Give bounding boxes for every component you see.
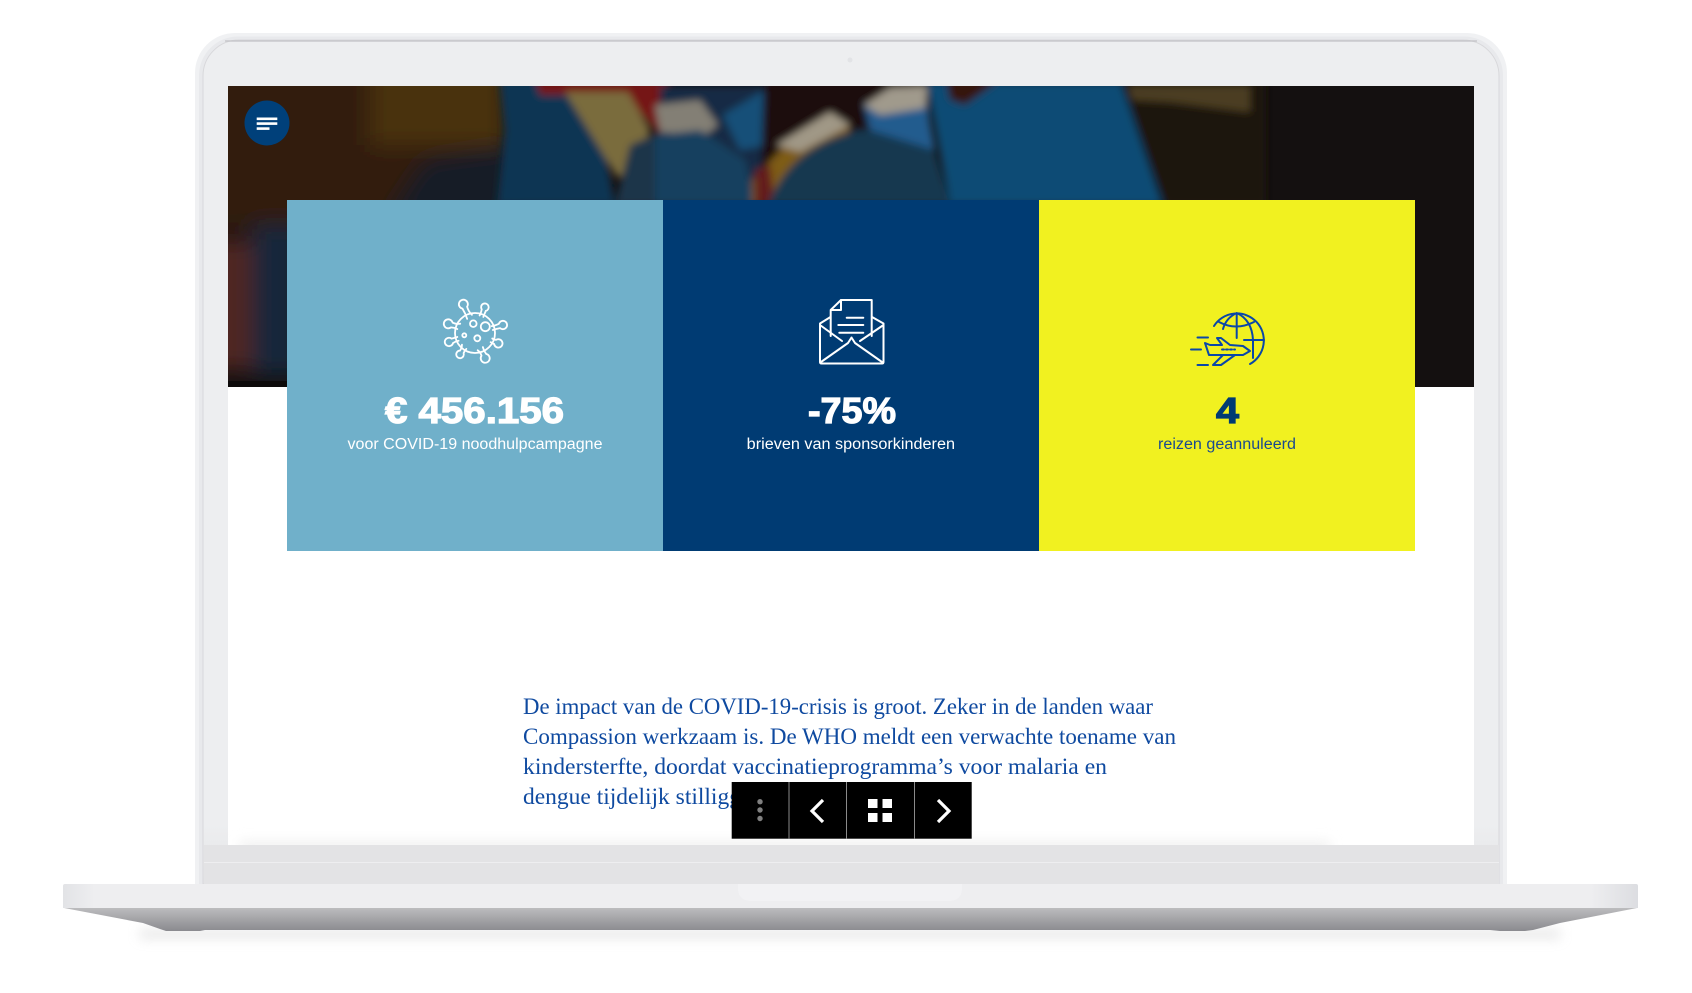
body text <box>523 694 1176 809</box>
screen <box>200 60 1474 852</box>
menu button <box>244 100 290 146</box>
footer shading <box>246 842 1324 845</box>
icon: plane and globe <box>1191 313 1264 365</box>
stat label: brieven van sponsorkinderen <box>747 436 955 453</box>
panel: trips <box>1039 200 1415 551</box>
body text: dengue tijdelijk stilliggen. <box>523 784 769 809</box>
stat value: € 456.156 <box>385 390 564 431</box>
icon: envelope <box>820 300 884 364</box>
icon: virus <box>443 298 508 364</box>
icon: grid <box>868 799 892 822</box>
stat label: reizen geannuleerd <box>1158 436 1296 453</box>
stat value: 4 <box>1216 390 1239 431</box>
body text: kindersterfte, doordat vaccinatieprogramma’s voor malaria en <box>523 754 1108 779</box>
laptop shadow <box>140 930 1560 938</box>
icon: next arrow <box>938 800 949 822</box>
icon: previous arrow <box>812 800 823 822</box>
panel: letters <box>663 200 1039 551</box>
laptop base <box>63 884 1638 931</box>
icon: dots <box>757 799 763 821</box>
stat label: voor COVID-19 noodhulpcampagne <box>348 436 602 453</box>
body text: De impact van de COVID-19-crisis is groot. Zeker in de landen waar <box>523 694 1153 719</box>
laptop lid <box>195 33 1507 884</box>
hero photo <box>200 60 1474 387</box>
panel: donation <box>287 200 663 551</box>
navigation controls <box>732 782 972 839</box>
stat value: -75% <box>808 390 896 431</box>
body text: Compassion werkzaam is. De WHO meldt een verwachte toename van <box>523 724 1176 749</box>
